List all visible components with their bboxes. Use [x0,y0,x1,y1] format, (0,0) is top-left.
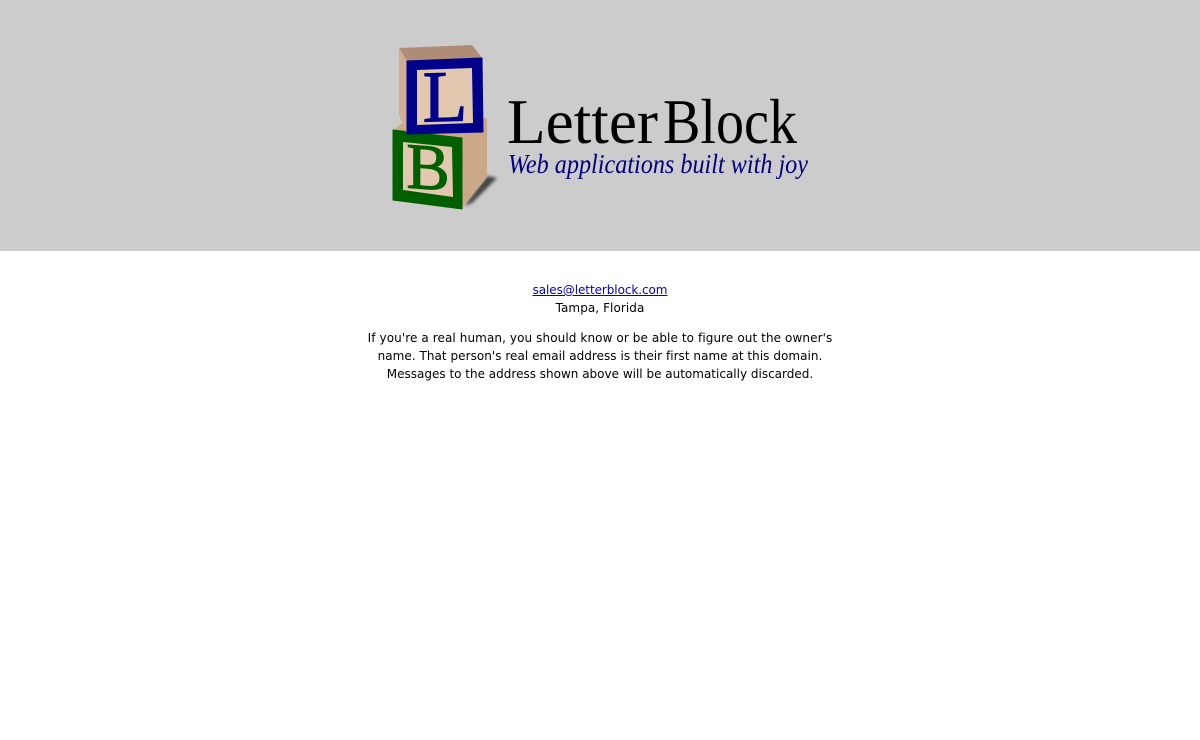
wordmark [507,86,797,157]
wordmark: Block [663,86,797,157]
block L side face [399,48,407,134]
notice paragraph [368,331,832,381]
block L top face [399,45,482,61]
block B inner panel [403,142,453,197]
block L blue face [407,58,483,134]
header banner [0,0,1200,251]
notice paragraph: name. That person's real email address is their first name at this domain. [378,349,822,363]
letter L: L [423,55,467,138]
block shadow [464,176,497,206]
block L inner panel [417,68,473,125]
contact details: Tampa, Florida [556,301,644,315]
contact text block [368,283,832,381]
contact details [532,283,668,315]
block B wood sides [393,118,487,208]
icon: letter blocks [393,45,497,209]
contact details: sales@letterblock.com [533,283,667,297]
notice paragraph: If you're a real human, you should know or be able to figure out the owner's [368,331,832,345]
notice paragraph: Messages to the address shown above will be automatically discarded. [387,367,813,381]
wordmark: Letter [507,86,658,157]
logo [392,45,808,210]
letter B: B [406,131,450,205]
block B green face [393,130,462,209]
tagline: Web applications built with joy [508,149,808,179]
